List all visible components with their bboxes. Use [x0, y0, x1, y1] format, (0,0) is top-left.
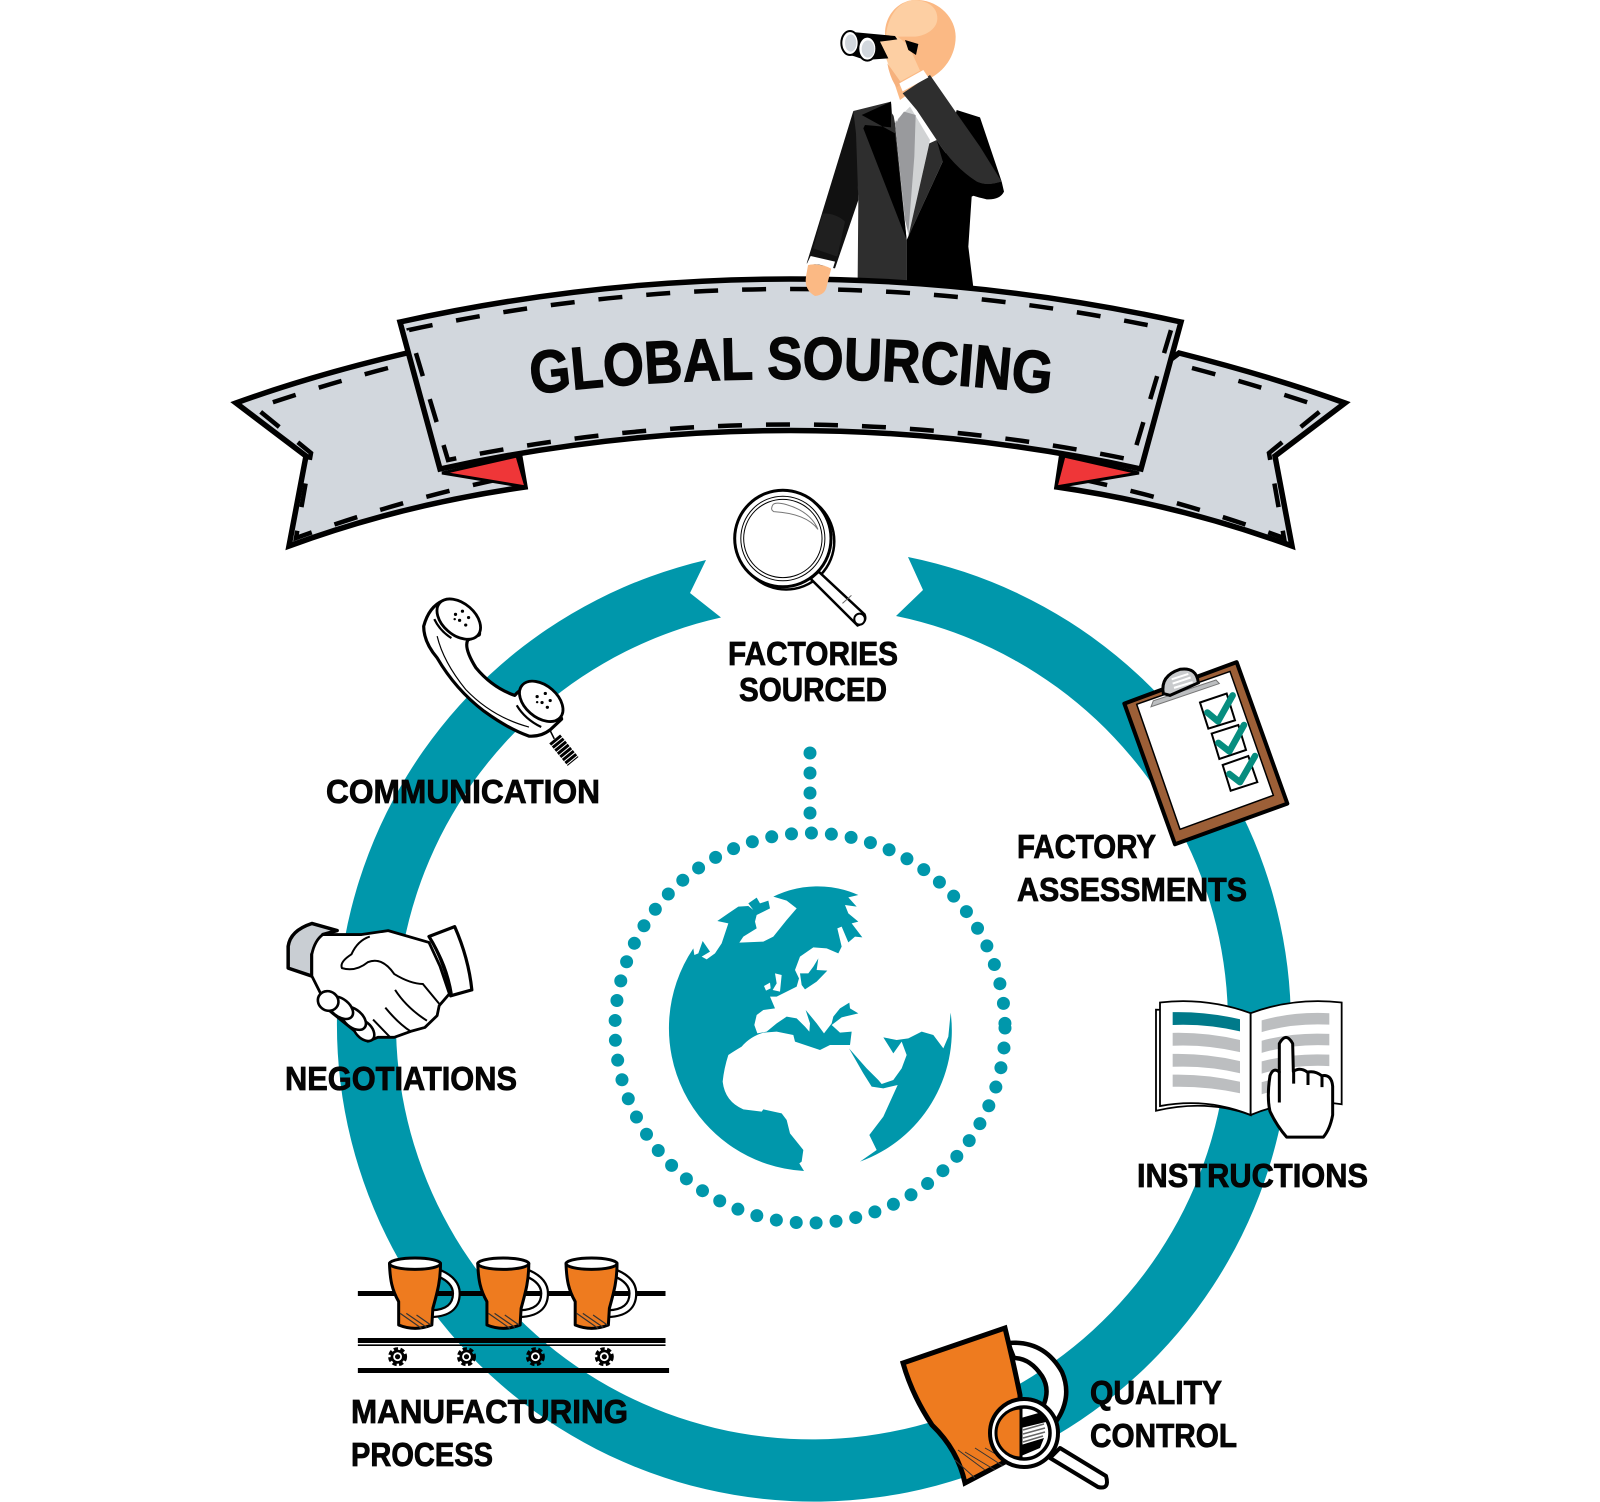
label: factories sourced [728, 635, 898, 708]
label: manufacturing process: PROCESS [351, 1436, 493, 1473]
businessman with binoculars [807, 0, 1004, 287]
label: manufacturing process: MANUFACTURING [351, 1393, 628, 1430]
teal process ring with arrow ends [337, 557, 1291, 1502]
label: factory assessments: ASSESSMENTS [1017, 871, 1247, 908]
hatching [955, 1448, 1010, 1478]
label: factories sourced: FACTORIES [728, 635, 898, 672]
orange cup body [903, 1328, 1022, 1483]
mug 3 [566, 1258, 633, 1328]
banner centre panel [400, 279, 1181, 469]
label: factories sourced: SOURCED [739, 671, 887, 708]
label: quality control: QUALITY [1090, 1374, 1222, 1411]
label: factory assessments [1017, 828, 1247, 908]
banner right tail [1056, 353, 1345, 546]
businessman hand on banner [806, 256, 835, 296]
label: manufacturing process [351, 1393, 628, 1473]
banner left tail [236, 353, 526, 546]
ribbon banner [230, 276, 1351, 550]
icon: clipboard checklist [1124, 662, 1287, 844]
icon: magnifying glass [735, 490, 865, 625]
icon: mugs on conveyor belt [358, 1258, 669, 1373]
icon: handshake [288, 923, 472, 1045]
cup handle [1008, 1343, 1066, 1427]
label: quality control [1090, 1374, 1237, 1454]
icon: quality control mug with magnifier [903, 1328, 1107, 1488]
mug 1 [389, 1258, 456, 1328]
icon: telephone handset [424, 591, 573, 761]
label: communication: COMMUNICATION [326, 773, 600, 810]
magnifier lens [990, 1399, 1058, 1467]
icon: open instruction book with pointing hand [1156, 1001, 1342, 1137]
globe [669, 886, 952, 1171]
dotted circle around globe [615, 833, 1005, 1223]
conveyor gears [390, 1349, 612, 1364]
checklist boxes [1200, 694, 1257, 791]
label: instructions: INSTRUCTIONS [1137, 1157, 1368, 1194]
title: GLOBAL SOURCING [530, 336, 1051, 394]
label: negotiations: NEGOTIATIONS [285, 1060, 517, 1097]
handshake fingers [314, 987, 378, 1045]
check marks [1207, 695, 1255, 782]
label: factory assessments: FACTORY [1017, 828, 1156, 865]
magnifier handle [1050, 1448, 1107, 1488]
dotted connector line [804, 746, 816, 820]
label: quality control: CONTROL [1090, 1417, 1237, 1454]
mug 2 [478, 1258, 545, 1328]
